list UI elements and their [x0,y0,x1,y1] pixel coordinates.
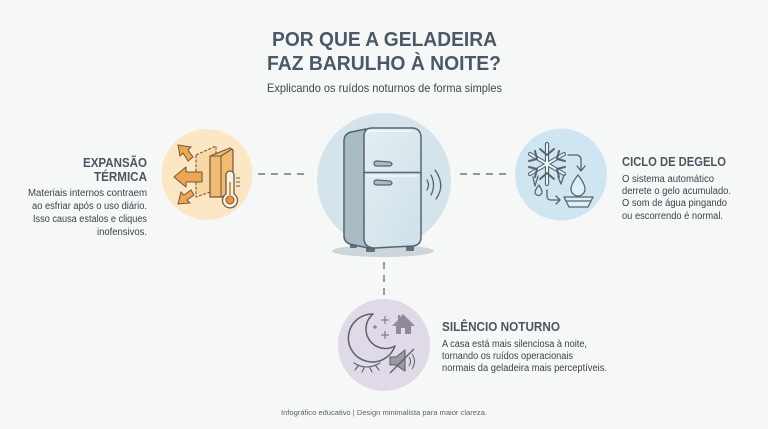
text block: silêncio: normais da geladeira mais perceptíveis. [442,363,607,374]
text block: degelo: O sistema automático [622,174,714,185]
text block: degelo [622,174,731,222]
icon: snowflake, drop and tray [515,128,607,220]
text block: silêncio: tornando os ruídos operacionais [442,351,573,362]
text block: silêncio: A casa está mais silenciosa à noite, [442,339,587,350]
subtitle: Explicando os ruídos noturnos de forma simples [267,81,502,95]
text block: degelo: ou escorrendo é normal. [622,211,723,222]
text block: expansão: inofensivos. [97,227,147,238]
title [267,29,501,75]
heading: ciclo de degelo: CICLO DE DEGELO [622,155,726,169]
text block: expansão: ao esfriar após o uso diário. [32,201,147,212]
text block: expansão [28,188,147,238]
text block: degelo: derrete o gelo acumulado. [622,186,731,197]
central fridge illustration [317,113,451,257]
heading: expansão térmica: TÉRMICA [94,169,147,184]
icon: moon, house, eye and muted speaker [338,299,430,391]
panel: night silence [338,299,607,391]
panel: defrost cycle [515,128,731,222]
title: POR QUE A GELADEIRA [272,29,497,51]
text block: degelo: O som de água pingando [622,198,727,209]
heading: expansão térmica [83,155,147,184]
footer: Infográfico educativo | Design minimalista para maior clareza. [281,408,487,417]
text block: expansão: Materiais internos contraem [28,188,147,199]
heading: silêncio noturno: SILÊNCIO NOTURNO [442,319,560,334]
icon: wall, thermometer and arrows [162,129,252,220]
icon: sound waves [427,170,441,199]
panel: thermal expansion [28,129,252,238]
text block: expansão: Isso causa estalos e cliques [33,214,147,225]
title: FAZ BARULHO À NOITE? [267,52,501,75]
heading: expansão térmica: EXPANSÃO [83,155,147,170]
text block: silêncio [442,339,607,374]
